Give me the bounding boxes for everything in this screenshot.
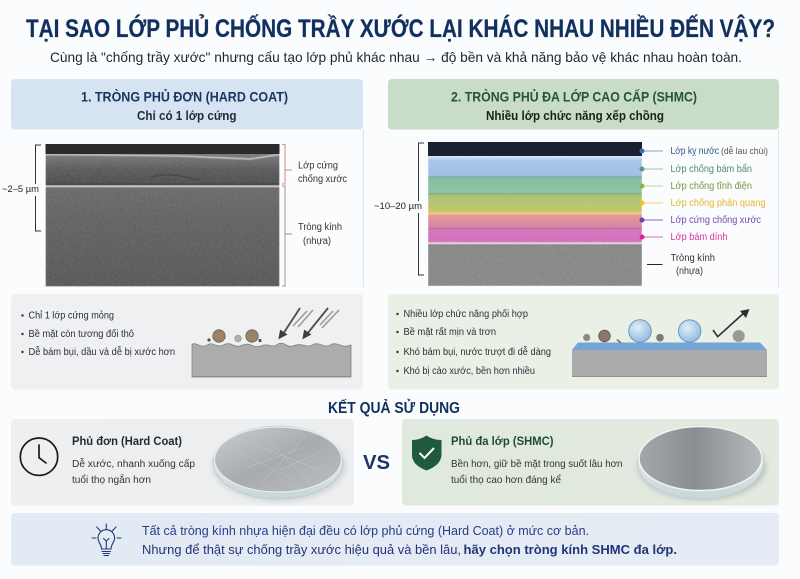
label: lens body: Tròng kính [670, 253, 715, 264]
label: hydrophobic layer [640, 146, 768, 157]
chart: colored layer stack [428, 142, 642, 286]
bullet list: hard coat: Bề mặt còn tương đối thô [28, 328, 134, 340]
panel: hard coat features [11, 294, 363, 390]
label: hard layer [282, 144, 347, 185]
icon: light bulb [92, 524, 121, 556]
text: SHMC result [451, 434, 623, 486]
label: antistatic layer: Lớp chống tĩnh điện [670, 180, 752, 192]
header: hard coat: Chỉ có 1 lớp cứng [137, 109, 236, 123]
panel: single hard coat [1, 79, 363, 287]
panel: multilayer SHMC [373, 79, 779, 287]
text: conclusion line 2 [142, 542, 677, 557]
label: adhesion layer [640, 232, 728, 243]
image: clear lens [638, 426, 766, 500]
panel: SHMC result [402, 419, 779, 506]
label: hydrophobic layer: (dễ lau chùi) [721, 146, 768, 157]
label: lens body [647, 253, 715, 277]
heading: usage results: KẾT QUẢ SỬ DỤNG [328, 399, 460, 417]
header: hard coat: 1. TRÒNG PHỦ ĐƠN (HARD COAT) [81, 88, 288, 104]
label: anti-smudge layer: Lớp chống bám bẩn [670, 163, 752, 175]
text: SHMC result: tuổi thọ cao hơn đáng kể [451, 474, 561, 486]
icon: clock [20, 438, 58, 475]
text: hard coat result [72, 434, 195, 486]
image: scratched lens [213, 426, 345, 501]
label: hard scratch layer [640, 214, 761, 226]
label: anti-reflective layer [640, 197, 766, 209]
header: SHMC [388, 79, 779, 130]
text: conclusion line 2: hãy chọn tròng kính SHMC đa lớp. [464, 542, 677, 557]
callout: conclusion [11, 513, 779, 566]
text: conclusion line 2: Nhưng để thật sự chống trầy xước hiệu quả và bền lâu, [142, 542, 461, 557]
label: lens body: (nhựa) [303, 236, 331, 247]
bracket: thickness 10-20 um: ~10–20 µm [374, 201, 422, 211]
header: SHMC: 2. TRÒNG PHỦ ĐA LỚP CAO CẤP (SHMC) [451, 88, 697, 104]
bullet list: hard coat: Dễ bám bụi, dầu và dễ bị xước hơn [28, 345, 175, 358]
diagram: rough surface with dust and scratches [192, 308, 351, 377]
header: SHMC: Nhiều lớp chức năng xếp chồng [486, 109, 664, 123]
text: SHMC result: Phủ đa lớp (SHMC) [451, 434, 554, 448]
text: hard coat result: Dễ xước, nhanh xuống cấp [72, 457, 195, 470]
text: VS: VS [363, 452, 390, 474]
bracket: thickness 2-5 um [1, 145, 41, 231]
bullet list: SHMC [396, 308, 551, 377]
label: hard scratch layer: Lớp cứng chống xước [670, 214, 761, 226]
label: lens body: (nhựa) [676, 266, 703, 277]
diagram: smooth coated surface with water beads [572, 309, 767, 377]
subtitle: Cùng là "chống trầy xước" nhưng cấu tạo lớp phủ khác nhau → độ bền và khả năng bảo vệ khác nhau hoàn toàn. [50, 49, 742, 65]
bullet list: hard coat [21, 310, 175, 358]
icon: shield with check [412, 436, 442, 470]
label: anti-reflective layer: Lớp chống phản quang [670, 197, 766, 209]
label: antistatic layer [640, 180, 752, 192]
bracket: thickness 10-20 um [373, 143, 424, 275]
bullet list: SHMC: Nhiều lớp chức năng phối hợp [404, 308, 528, 320]
label: hard layer: chống xước [298, 173, 347, 185]
text: hard coat result: tuổi thọ ngắn hơn [72, 473, 151, 486]
bullet list: SHMC: Bề mặt rất mịn và trơn [404, 326, 496, 338]
label: anti-smudge layer [640, 163, 752, 175]
panel: hard coat result [11, 419, 354, 506]
label: lens body [282, 186, 342, 286]
bracket: thickness 2-5 um: ~2–5 µm [2, 184, 39, 194]
label: hydrophobic layer: Lớp kỵ nước [670, 146, 719, 157]
bullet list: SHMC: Khó bị cào xước, bền hơn nhiều [404, 365, 535, 377]
text: hard coat result: Phủ đơn (Hard Coat) [72, 434, 182, 448]
label: adhesion layer: Lớp bám dính [670, 232, 728, 243]
bullet list: hard coat: Chỉ 1 lớp cứng mỏng [28, 310, 114, 322]
text: conclusion line 1: Tất cả tròng kính nhựa hiện đại đều có lớp phủ cứng (Hard Coat) ở mức cơ bản. [142, 523, 589, 538]
label: hard layer: Lớp cứng [298, 160, 338, 172]
bullet list: SHMC: Khó bám bụi, nước trượt đi dễ dàng [404, 345, 551, 358]
chart: SEM cross-section single coat [46, 144, 280, 286]
header: hard coat [11, 79, 363, 130]
label: lens body: Tròng kính [298, 222, 342, 233]
panel: SHMC features [388, 294, 779, 390]
text: SHMC result: Bền hơn, giữ bề mặt trong suốt lâu hơn [451, 458, 623, 470]
